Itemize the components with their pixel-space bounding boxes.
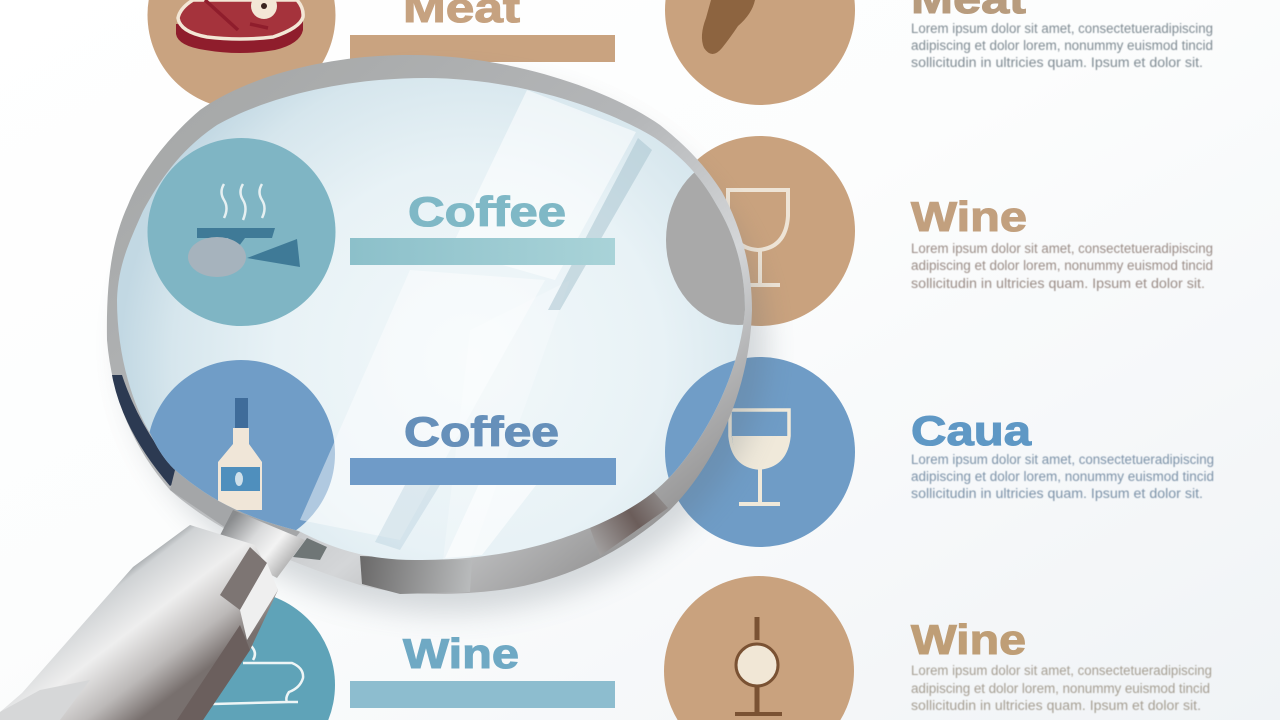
row: wine bottom right [664,576,1212,720]
text: Wine description: adipiscing et dolor lorem, nonummy euismod tincid [911,258,1213,273]
icon: coffee steam circle [148,138,336,326]
text: Wine bottom description [911,663,1212,713]
icon: cup circle [147,591,335,720]
text: Wine description: Lorem ipsum dolor sit amet, consectetueradipiscing [911,241,1213,256]
lens rim [107,55,752,594]
handle dark collar [220,547,267,610]
icon: drumstick circle [665,0,855,105]
handle [0,510,327,720]
icon: blue wine glass circle [665,357,855,547]
glass reflections [300,90,652,560]
heading: Coffee blue: Coffee [404,408,559,455]
lens glass [117,78,745,560]
heading: Wine bottom right: Wine [911,616,1026,663]
handle neck [215,510,305,578]
heading: Wine right: Wine [911,193,1027,240]
icon: steak circle [148,0,336,109]
text: Wine bottom description: Lorem ipsum dolor sit amet, consectetueradipiscing [911,663,1212,678]
row: wine bottom left [147,591,615,720]
text: Wine bottom description: sollicitudin in ultricies quam. Ipsum et dolor sit. [911,698,1201,713]
row: meat left [148,0,615,109]
magnified blue wine circle [665,360,736,478]
handle end [0,680,90,720]
text: Wine bottom description: adipiscing et dolor lorem, nonummy euismod tincid [911,681,1210,696]
bar: Coffee blue [350,458,616,485]
bar: Meat [350,35,615,62]
row: meat right [665,0,1213,105]
text: Meat description [911,21,1213,70]
text: Wine description: sollicitudin in ultricies quam. Ipsum et dolor sit. [911,276,1205,291]
text: Meat description: Lorem ipsum dolor sit amet, consectetueradipiscing [911,21,1213,36]
bar: Wine left [350,681,615,708]
text: Caua description: adipiscing et dolor lorem, nonummy euismod tincid [911,469,1214,484]
text: Caua description [911,452,1214,501]
magnified grey wine circle [666,172,745,325]
icon: bottle circle [150,360,335,530]
text: Caua description: Lorem ipsum dolor sit amet, consectetueradipiscing [911,452,1214,467]
lens shadow [123,77,767,613]
icon: wine glass circle [665,136,855,326]
heading: Caua: Caua [911,407,1032,454]
bar: Coffee teal [350,238,615,265]
handle barrel [0,525,278,720]
magnifying glass [0,55,855,720]
row: caua right [665,357,1214,547]
text: Caua description: sollicitudin in ultricies quam. Ipsum et dolor sit. [911,486,1203,501]
text: Meat description: sollicitudin in ultricies quam. Ipsum et dolor sit. [911,55,1203,70]
handle dark band [177,625,250,720]
heading: Coffee teal: Coffee [408,188,566,235]
text: Meat description: adipiscing et dolor lorem, nonummy euismod tincid [911,38,1213,53]
text: Wine description [911,241,1213,291]
handle white collar [240,563,278,640]
rim fold wedge [293,538,327,560]
heading: Wine left: Wine [403,630,519,677]
magnified contents [148,90,745,558]
row: wine right [665,136,1213,326]
icon: goblet circle [664,576,854,720]
